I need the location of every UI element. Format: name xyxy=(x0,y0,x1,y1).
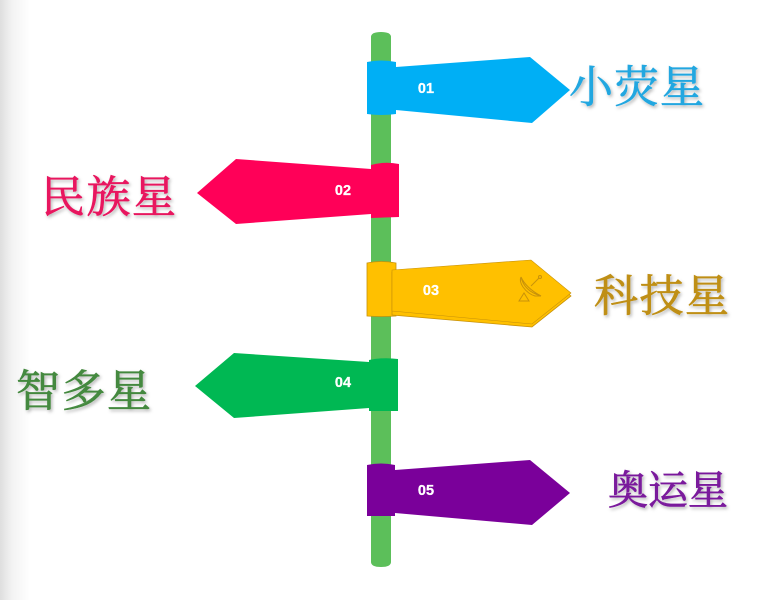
background left shadow xyxy=(0,0,30,600)
sign 04 xyxy=(195,353,398,418)
sign 02 xyxy=(197,159,399,224)
pole xyxy=(371,32,391,567)
sign 03: 03 xyxy=(423,283,439,299)
label 03: 科技星 xyxy=(594,272,729,321)
label 04: 智多星 xyxy=(16,367,151,416)
sign 02: 02 xyxy=(335,183,351,199)
label 02: 民族星 xyxy=(41,173,176,222)
sign 03 xyxy=(367,260,571,327)
sign 05 xyxy=(367,460,570,525)
label 05: 奥运星 xyxy=(608,468,728,513)
sign 01 xyxy=(367,57,570,123)
sign 05: 05 xyxy=(418,483,434,499)
sign 04: 04 xyxy=(335,375,351,391)
icon: satellite dish xyxy=(519,276,542,301)
label 01: 小荧星 xyxy=(569,63,704,112)
sign 01: 01 xyxy=(418,81,434,97)
